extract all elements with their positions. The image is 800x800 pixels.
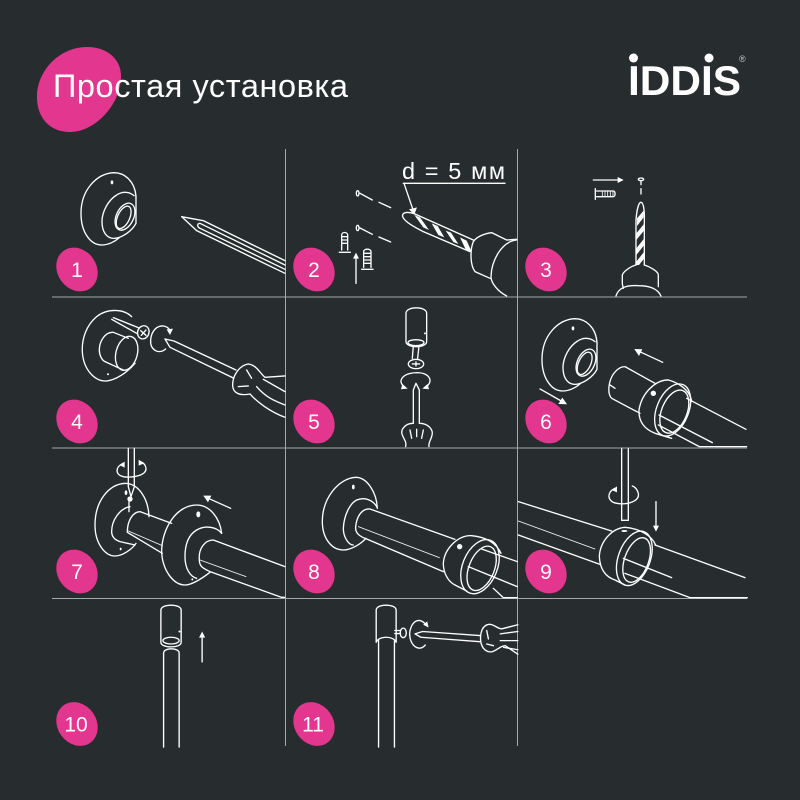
badge 3: 3 (540, 259, 552, 282)
badge 6: 6 (540, 411, 552, 434)
badge 7 (48, 541, 106, 602)
drill diameter label: d = 5 мм (402, 158, 505, 184)
panel: step 5 (285, 308, 432, 452)
panel: step 8 (285, 477, 517, 602)
icon: vertical drill and dowel (593, 177, 661, 296)
badge 8: 8 (308, 561, 320, 584)
panel: step 10 (48, 605, 205, 754)
icon: cap, screw and screwdriver (401, 308, 432, 447)
icon: arrow (203, 496, 231, 508)
badge 5 (285, 391, 343, 452)
grid lines (52, 149, 747, 746)
icon: pipe with flange and ring (322, 477, 517, 599)
icon: assembly with two flanges (95, 448, 285, 597)
icon: arrows (540, 349, 663, 404)
panel: step 6 (517, 319, 747, 452)
icon: flange (81, 173, 139, 245)
icon: cap on rod with screwdriver (376, 605, 518, 747)
badge 2 (285, 239, 343, 300)
panel: step 7 (48, 448, 285, 602)
badge 1: 1 (71, 259, 83, 282)
panel: step 3 (517, 177, 661, 300)
icon: arrow (653, 502, 659, 532)
icon: flange with screw (82, 310, 151, 381)
badge 1 (48, 239, 106, 300)
icon: rotation arrow (151, 326, 173, 352)
badge 4 (48, 391, 106, 452)
badge 7: 7 (71, 561, 83, 584)
icon: drill and fasteners (339, 183, 517, 296)
badge 9: 9 (540, 561, 552, 584)
title blob (37, 47, 121, 132)
icon: pipe with ring and tool (518, 448, 747, 598)
badge 5: 5 (308, 411, 320, 434)
badge 11: 11 (302, 714, 324, 736)
icon: pipe with ring (609, 367, 747, 447)
title: Простая установка (53, 68, 349, 104)
icon: pencil (182, 217, 285, 273)
logo: ® (739, 54, 746, 64)
icon: screwdriver (165, 339, 285, 417)
icon: arrow (199, 632, 205, 662)
badge 2: 2 (308, 259, 320, 282)
panel: step 4 (48, 310, 285, 452)
badge 8 (285, 541, 343, 602)
panel: step 2 (285, 158, 517, 300)
badge 10: 10 (64, 714, 88, 736)
icon: flange (542, 319, 600, 391)
logo: IDDIS (628, 57, 741, 104)
panel: step 9 (517, 448, 747, 602)
badge 4: 4 (71, 411, 83, 434)
badge 9 (517, 541, 575, 602)
badge 10 (48, 694, 106, 754)
badge 11 (285, 694, 343, 754)
badge 6 (517, 391, 575, 452)
panel: step 1 (48, 173, 285, 300)
panel: step 11 (285, 605, 518, 754)
icon: cap and rod (161, 605, 181, 747)
badge 3 (517, 239, 575, 300)
